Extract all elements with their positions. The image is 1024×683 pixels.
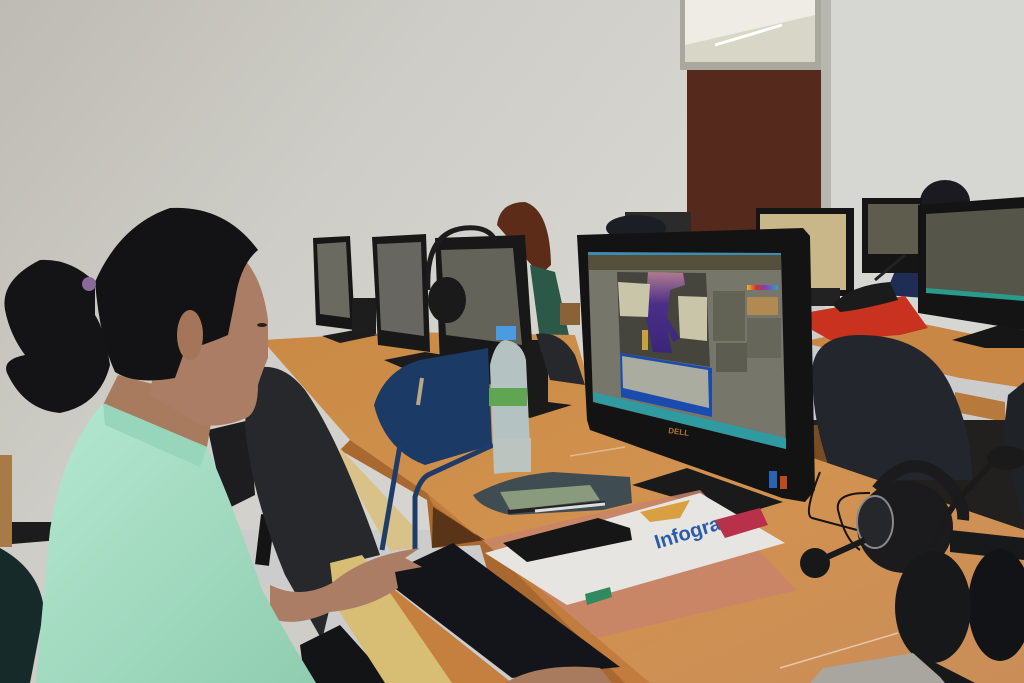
monitor brand: DELL	[668, 426, 690, 438]
collar	[103, 403, 207, 467]
purple figure on screen	[645, 272, 685, 353]
back monitors right	[756, 180, 1024, 348]
back monitor 2	[372, 234, 450, 369]
artboard on screen	[617, 272, 710, 367]
person in back right	[885, 180, 970, 300]
far right desk	[810, 320, 1024, 530]
monitor: back centre	[756, 208, 854, 306]
pencil case	[473, 472, 632, 515]
earcup	[857, 481, 953, 573]
booklet red band	[715, 508, 768, 538]
upper shelf lip	[340, 448, 415, 551]
far right chair edge	[1002, 382, 1024, 520]
face	[150, 255, 268, 426]
woman	[4, 208, 316, 683]
neck	[103, 375, 215, 447]
headset cables	[809, 472, 870, 550]
stack on desk	[810, 653, 945, 683]
boom mic upper right	[933, 446, 1024, 547]
headset on red jacket	[833, 255, 905, 312]
right headset	[800, 446, 1024, 578]
woman's chair	[245, 367, 380, 640]
colour swatches on screen	[713, 285, 781, 372]
back monitor 3	[435, 235, 572, 418]
right wall	[825, 0, 1024, 340]
far chair right	[812, 335, 972, 480]
desk seam line	[570, 447, 625, 456]
monitor screen	[588, 252, 786, 449]
door frame right	[821, 0, 831, 210]
near hand	[505, 667, 612, 683]
keyboard tray	[365, 565, 512, 683]
monitor body	[577, 228, 815, 502]
chair base behind	[208, 420, 268, 565]
near desk seam	[780, 625, 975, 683]
ponytail	[4, 260, 110, 413]
arm and hand	[270, 548, 422, 622]
dark lower area	[300, 625, 392, 683]
monitor: back right	[862, 198, 922, 273]
blue box on screen	[620, 353, 712, 417]
back monitor 1	[313, 236, 378, 343]
ear	[177, 310, 203, 360]
keyboard	[380, 543, 620, 678]
headband	[877, 466, 963, 520]
monitor: right edge Dell	[918, 197, 1024, 348]
mic foam	[800, 540, 865, 578]
main monitor	[577, 228, 815, 516]
hair tie	[82, 277, 96, 291]
water bottle	[489, 326, 531, 474]
front armrest lip	[330, 555, 452, 683]
red jacket	[810, 296, 928, 340]
booklet page	[485, 493, 785, 605]
hair	[95, 208, 258, 380]
main desk top	[262, 332, 1024, 683]
desk front edge and underside	[340, 440, 650, 683]
blue bag	[374, 348, 493, 550]
booklet crest	[640, 500, 690, 522]
right lower headset	[895, 549, 1024, 663]
phone	[503, 518, 632, 562]
back wall	[0, 0, 690, 530]
plastic sleeve	[483, 490, 797, 638]
headphones on monitor	[428, 228, 495, 323]
back person red hair	[497, 202, 570, 340]
window above door	[680, 0, 828, 70]
back person dark hair and monitor	[606, 212, 691, 241]
monitor stand	[632, 468, 783, 516]
back table stub	[560, 303, 580, 325]
door	[687, 70, 821, 235]
labels on screen	[618, 282, 707, 350]
back chair	[536, 333, 585, 385]
green clip	[585, 587, 612, 605]
booklet title: Infogra	[652, 513, 724, 554]
headset band across	[950, 530, 1024, 560]
near left chair	[0, 548, 44, 683]
booklet	[483, 490, 797, 638]
shirt	[36, 403, 316, 683]
badge stickers	[769, 471, 787, 489]
floor and skirting	[0, 455, 330, 683]
